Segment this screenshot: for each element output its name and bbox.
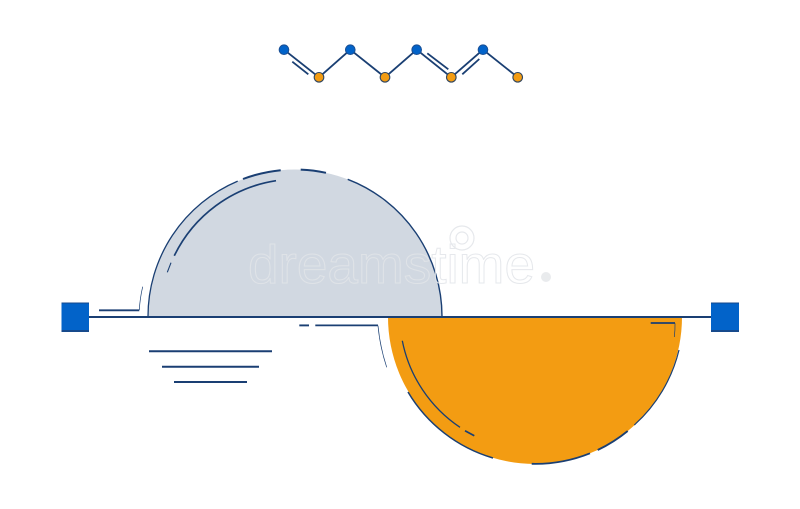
watermark: dreamstime xyxy=(248,235,535,295)
orange semicircle xyxy=(388,317,682,464)
grey semicircle xyxy=(148,170,442,316)
stepped lines under axis xyxy=(149,351,272,382)
accent strokes near orange semicircle xyxy=(299,325,387,367)
zigzag chain of dots xyxy=(279,45,522,82)
horizontal axis line xyxy=(89,316,711,318)
right blue square node xyxy=(711,302,739,332)
left blue square node xyxy=(62,302,89,332)
accent strokes near grey semicircle xyxy=(99,287,143,310)
